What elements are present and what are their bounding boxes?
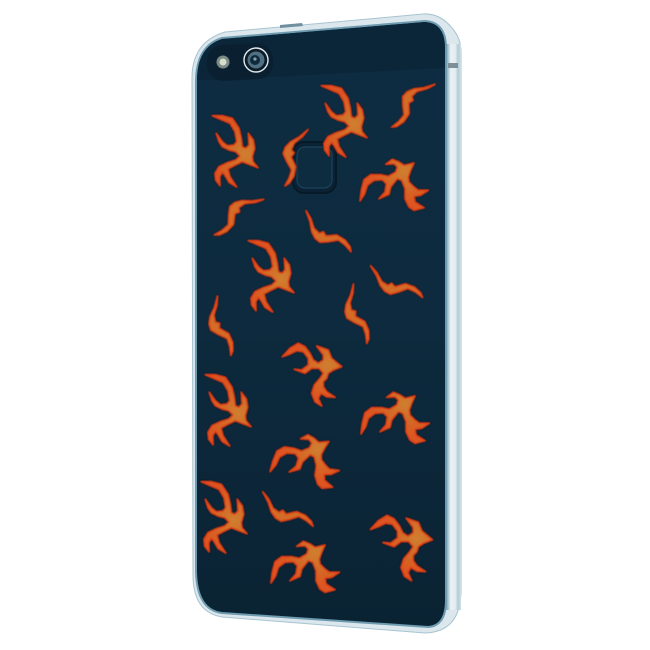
wisp 2 (371, 257, 423, 306)
flame 1 (212, 116, 258, 187)
flame 8 (269, 430, 344, 490)
right rim (446, 44, 461, 610)
fingerprint sensor (293, 142, 336, 193)
flame 11 (271, 541, 339, 592)
wisp 5 (263, 486, 313, 532)
flame 10 (371, 515, 432, 581)
flame 2 (321, 86, 367, 157)
wisp 4 (194, 296, 254, 355)
top rim buttons (280, 23, 303, 28)
wisp 8 (214, 191, 264, 243)
case outer shell (192, 14, 461, 633)
volume key band (448, 63, 458, 68)
camera housing (206, 42, 274, 82)
flame 5 (282, 343, 342, 406)
camera band (197, 22, 445, 80)
wisp 3 (330, 284, 390, 343)
wisp 6 (392, 82, 435, 129)
phone back panel (196, 21, 446, 627)
camera lens (244, 48, 268, 72)
flash (216, 56, 230, 68)
flame 4 (248, 241, 294, 312)
flame pattern (194, 82, 435, 592)
flame 9 (201, 482, 247, 553)
flame 3 (360, 159, 428, 210)
flame 7 (361, 392, 429, 443)
wisp 1 (306, 211, 351, 252)
wisp 7 (270, 130, 323, 186)
flame 6 (205, 375, 251, 446)
